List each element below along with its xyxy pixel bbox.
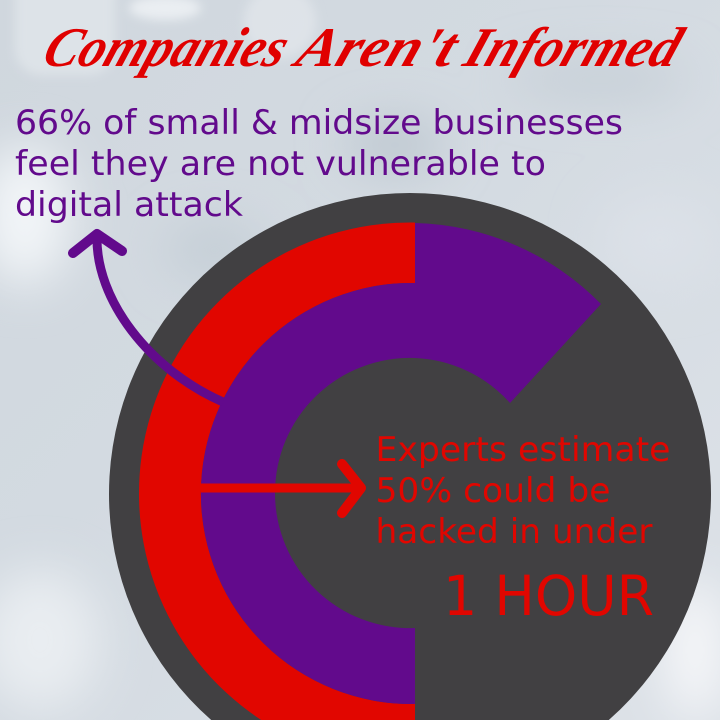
purple wedge: [415, 223, 601, 403]
text: 66% statistic: [15, 103, 623, 225]
text: 66% statistic: feel they are not vulnerable to: [15, 144, 546, 184]
purple ring segment: [201, 283, 415, 704]
title: Companies: [35, 16, 298, 79]
text: expert estimate: Experts estimate: [376, 430, 670, 470]
title: Informed: [455, 16, 692, 79]
title: [35, 16, 692, 79]
donut chart: [109, 193, 711, 720]
title: Aren't: [285, 16, 469, 79]
text: expert estimate: hacked in under: [376, 512, 653, 552]
dark backing circle: [109, 193, 711, 720]
text: 66% statistic: digital attack: [15, 185, 243, 225]
text: expert estimate: 50% could be: [376, 471, 610, 511]
text: 1 hour: 1 HOUR: [443, 564, 654, 628]
red ring segment: [139, 223, 415, 720]
text: 66% statistic: 66% of small & midsize businesses: [15, 103, 623, 143]
text: expert estimate: [376, 430, 670, 552]
arrow: red to estimate: [201, 464, 361, 513]
arrow: purple to statistic: [73, 234, 223, 402]
